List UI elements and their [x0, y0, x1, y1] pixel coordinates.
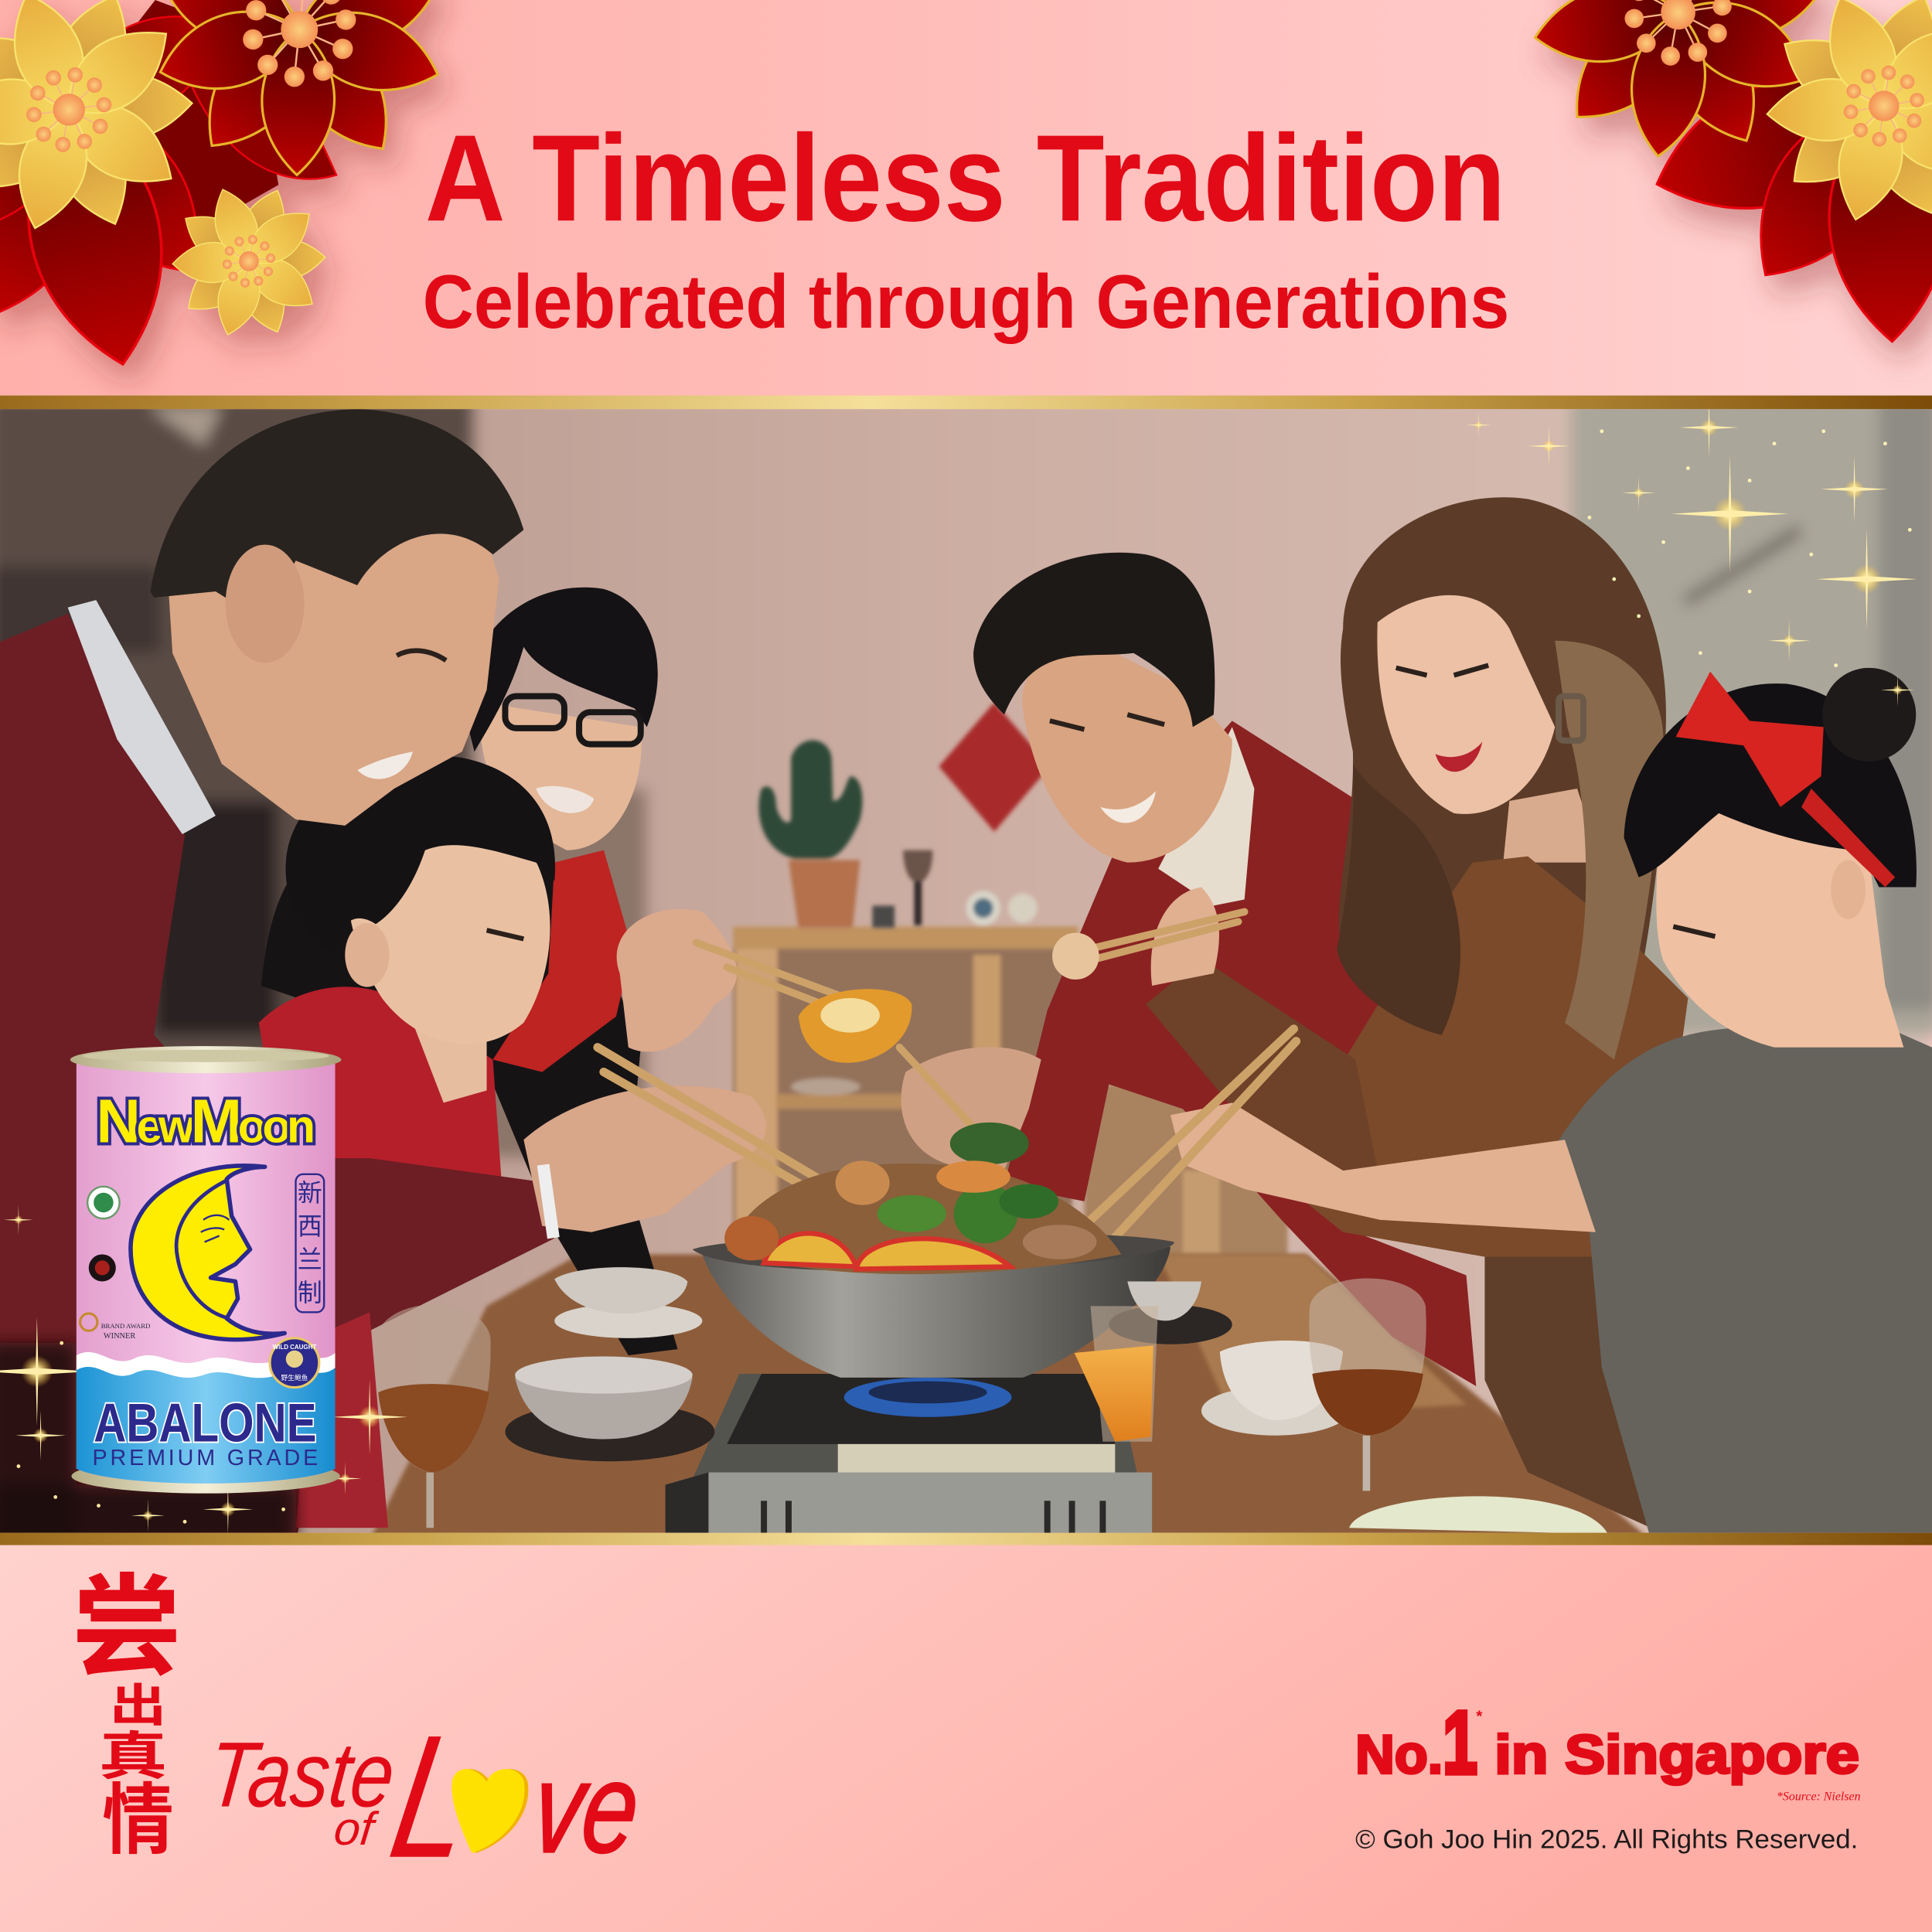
gold flower left — [0, 0, 194, 237]
top gold band — [0, 396, 1932, 409]
No.1 in Singapore claim: in Singapore — [1494, 1724, 1859, 1784]
Taste of Love logo: L — [379, 1699, 487, 1894]
wine glass left — [375, 1304, 491, 1528]
can label Chinese text: 兰 — [298, 1245, 322, 1273]
Chinese calligraphy slogan: 出 — [110, 1681, 166, 1732]
Chinese calligraphy slogan — [71, 1566, 182, 1864]
shelf ornaments — [872, 850, 1038, 928]
subtitle: Celebrated through Generations — [423, 259, 1509, 344]
red flower right — [1528, 0, 1828, 162]
small gold flower — [172, 182, 326, 340]
fish ball on chopsticks — [1052, 932, 1099, 980]
can badges — [80, 1187, 150, 1341]
copyright: © Goh Joo Hin 2025. All Rights Reserved. — [1355, 1825, 1858, 1855]
can grade: PREMIUM GRADE — [93, 1446, 318, 1470]
wild caught badge — [270, 1338, 319, 1388]
Taste of Love logo: Taste — [203, 1723, 400, 1826]
can label Chinese text: 西 — [298, 1212, 322, 1240]
product: New Moon abalone can — [70, 1046, 341, 1494]
Chinese calligraphy slogan: 尝 — [71, 1566, 182, 1690]
top header background — [0, 0, 1932, 397]
wild caught badge: WILD CAUGHT — [273, 1344, 316, 1351]
can blue band — [77, 1363, 336, 1484]
No.1 in Singapore claim — [1355, 1693, 1859, 1792]
can badges: BRAND AWARD — [101, 1322, 150, 1330]
can badges: WINNER — [104, 1332, 135, 1341]
person: little girl with red bow — [1170, 668, 1932, 1540]
gold flower right — [1762, 0, 1932, 231]
red flower top — [150, 0, 449, 179]
left-bottom dark vignette for sparkles — [0, 1343, 295, 1552]
Taste of Love logo: of — [332, 1802, 381, 1855]
person: young man in red shirt — [901, 553, 1476, 1386]
room background — [0, 394, 1932, 1552]
can label Chinese text — [295, 1174, 324, 1312]
tableware — [505, 1267, 1608, 1534]
wall decoration: red paper diamond — [939, 702, 1050, 832]
No.1 in Singapore claim: 1 — [1443, 1693, 1477, 1792]
Chinese calligraphy slogan: 情 — [102, 1778, 174, 1864]
Chinese calligraphy slogan: 真 — [99, 1728, 168, 1785]
can label Chinese text: 新 — [298, 1179, 322, 1207]
can label Chinese text: 制 — [298, 1279, 322, 1307]
cactus plant in terracotta pot — [759, 740, 863, 928]
Taste of Love logo: ve — [527, 1737, 646, 1879]
can product name: ABALONE — [94, 1393, 317, 1453]
broccoli in chopsticks — [950, 1123, 1029, 1164]
wild caught badge: 野生鲍鱼 — [281, 1373, 308, 1382]
person: older woman with glasses — [261, 588, 737, 1355]
person: grandfather in maroon sweater — [0, 409, 766, 1540]
crescent moon with face logo — [131, 1166, 285, 1340]
title: A Timeless Tradition — [425, 109, 1506, 247]
photo: family sharing a poon choi meal — [0, 394, 1932, 1552]
person: small boy in red top — [259, 755, 555, 1521]
flowers top right — [1528, 0, 1932, 343]
blue gas flame — [844, 1378, 1011, 1417]
chopsticks — [598, 911, 1297, 1251]
No.1 in Singapore claim: No. — [1355, 1724, 1443, 1784]
abalone held in chopsticks — [799, 989, 911, 1063]
Taste of Love logo — [203, 1699, 646, 1894]
source note: *Source: Nielsen — [1777, 1790, 1861, 1803]
back red petals right — [1637, 49, 1932, 343]
bottom footer background — [0, 1545, 1932, 1932]
person: young woman with long hair — [1146, 497, 1688, 1528]
can brand name: NewMoon — [96, 1086, 315, 1155]
flowers top left — [0, 0, 449, 377]
No.1 in Singapore claim: * — [1476, 1707, 1483, 1725]
wine glass right — [1309, 1279, 1426, 1491]
dining table — [370, 1254, 1651, 1540]
sparkles left — [0, 1205, 407, 1535]
heart — [455, 1769, 528, 1853]
sparkles right — [1466, 398, 1917, 707]
poon choi pot — [693, 1160, 1174, 1378]
can white wave — [77, 1352, 336, 1378]
stove — [666, 1374, 1152, 1540]
boy's red sleeve below arm — [295, 1312, 388, 1528]
abalone centre — [820, 998, 880, 1033]
shelf cabinet — [733, 926, 1287, 1257]
bottom gold band — [0, 1533, 1932, 1545]
back red petals left — [0, 0, 278, 377]
can lid — [70, 1046, 341, 1073]
